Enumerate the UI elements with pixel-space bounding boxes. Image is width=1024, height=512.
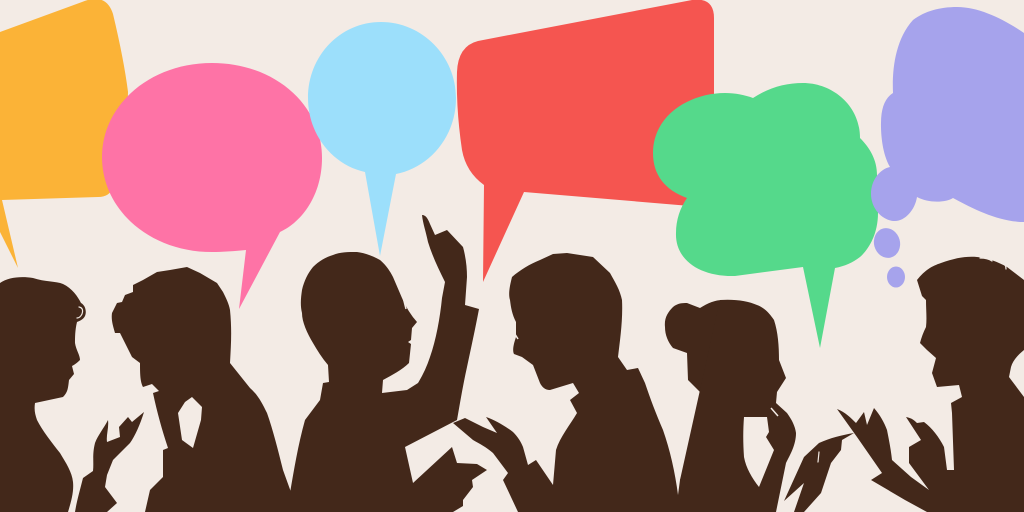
speech bubble: green [653, 83, 879, 348]
person 1: woman at left with raised hand [0, 277, 144, 512]
person 3: man with raised pointing hand and glasses [290, 215, 487, 512]
thought bubble: purple [871, 7, 1024, 288]
speech bubble: pink [102, 63, 322, 309]
person 5: second hand holding phone [784, 433, 854, 512]
person 5: woman with hair bun and hand on chin [680, 300, 796, 512]
person 6: curly-haired man gesturing at right [837, 257, 1024, 512]
speech bubble: blue [308, 22, 456, 256]
person 2: man with hand on chin [112, 267, 300, 512]
person 4: man leaning forward with open hand [453, 253, 724, 512]
thought dot: small [887, 266, 905, 288]
glasses highlights [403, 297, 778, 416]
speech bubble: red [457, 0, 714, 282]
thought dot: medium [871, 225, 903, 261]
hair highlights [77, 258, 1006, 462]
speech bubble: orange [0, 0, 128, 268]
